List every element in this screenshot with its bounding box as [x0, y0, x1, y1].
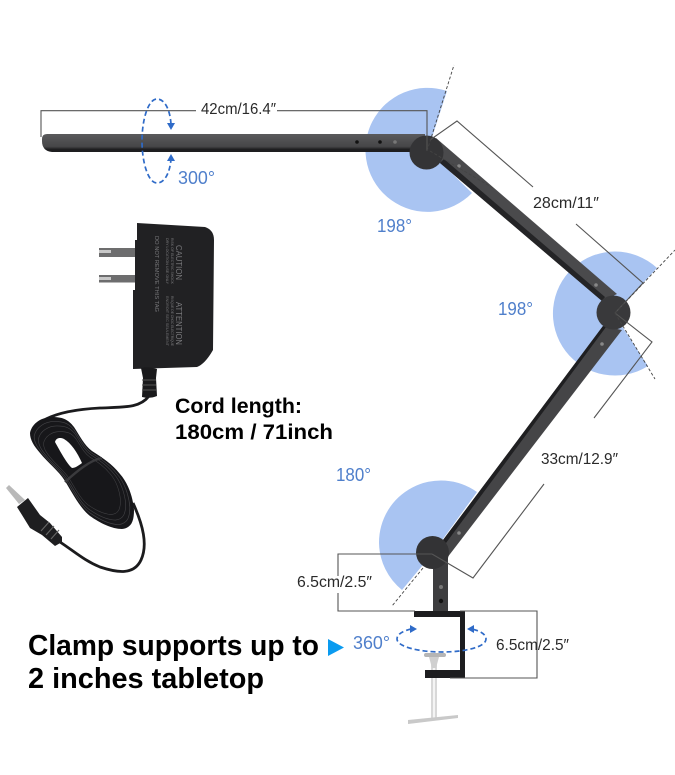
blue sector: upper joint 198 degrees — [365, 88, 472, 212]
dashed angle limit lines — [392, 65, 675, 606]
dimension: 6.5cm clamp — [450, 611, 569, 678]
adapter label text — [153, 236, 184, 347]
angle label: 300: 300° — [178, 168, 215, 188]
joint: upper — [410, 136, 444, 170]
barrel plug — [6, 485, 62, 546]
cord — [46, 396, 149, 571]
rotation arrow: 300 degrees — [142, 99, 175, 183]
lamp head arm — [42, 134, 425, 152]
angle label: 360: 360° — [353, 633, 390, 653]
dimension: 6.5cm clamp: 6.5cm/2.5″ — [496, 637, 569, 654]
adapter label text: CAUTION — [174, 245, 184, 280]
adapter label text: RISQUE DE CHOC ELECTRIQUE — [170, 296, 174, 347]
dimension: 6.5cm post: 6.5cm/2.5″ — [297, 574, 373, 591]
rotation arrow: 360 degrees — [397, 625, 486, 652]
strain relief — [141, 367, 157, 398]
cord length caption: Cord length: — [175, 395, 302, 418]
dimension: 6.5cm post — [297, 554, 432, 611]
blue pointer triangle — [328, 639, 344, 656]
upper arm — [436, 138, 617, 301]
lower arm — [443, 326, 622, 558]
cord length caption — [175, 395, 333, 444]
base post — [433, 548, 448, 614]
clamp screw and T handle — [408, 653, 458, 724]
blue sector: lower joint 180 degrees — [379, 480, 477, 590]
adapter label text: DO NOT REMOVE THIS TAG — [153, 236, 159, 312]
adapter label text: ATTENTION — [174, 302, 184, 345]
joint: lower — [416, 536, 449, 569]
dimension: 33cm: 33cm/12.9″ — [541, 451, 618, 468]
clamp capacity caption: Clamp supports up to — [28, 630, 319, 662]
dimension: 28cm — [430, 121, 643, 313]
blue sector: middle joint 198 degrees — [553, 252, 657, 376]
clamp capacity caption — [28, 630, 319, 695]
adapter label text: RISK OF ELECTRIC SHOCK — [170, 238, 174, 285]
cord coil — [30, 417, 134, 529]
power adapter — [6, 223, 214, 571]
adapter label text: ENDROIT SEC SEULEMENT — [165, 296, 169, 347]
cord length caption: 180cm / 71inch — [175, 421, 333, 444]
dimension: 33cm — [432, 313, 652, 578]
angle label: 198 middle: 198° — [498, 299, 533, 319]
joint: middle — [596, 296, 630, 330]
adapter body — [133, 223, 214, 369]
adapter label text: DRY LOCATION USE ONLY — [165, 238, 169, 285]
dimension: 42cm: 42cm/16.4″ — [201, 101, 276, 118]
clamp body — [414, 611, 465, 678]
clamp capacity caption: 2 inches tabletop — [28, 663, 264, 695]
angle label: 180: 180° — [336, 465, 371, 485]
dimension: 42cm — [41, 101, 427, 151]
angle label: 198 upper: 198° — [377, 216, 412, 236]
dimension: 28cm: 28cm/11″ — [533, 195, 600, 212]
plug prongs — [99, 248, 135, 282]
